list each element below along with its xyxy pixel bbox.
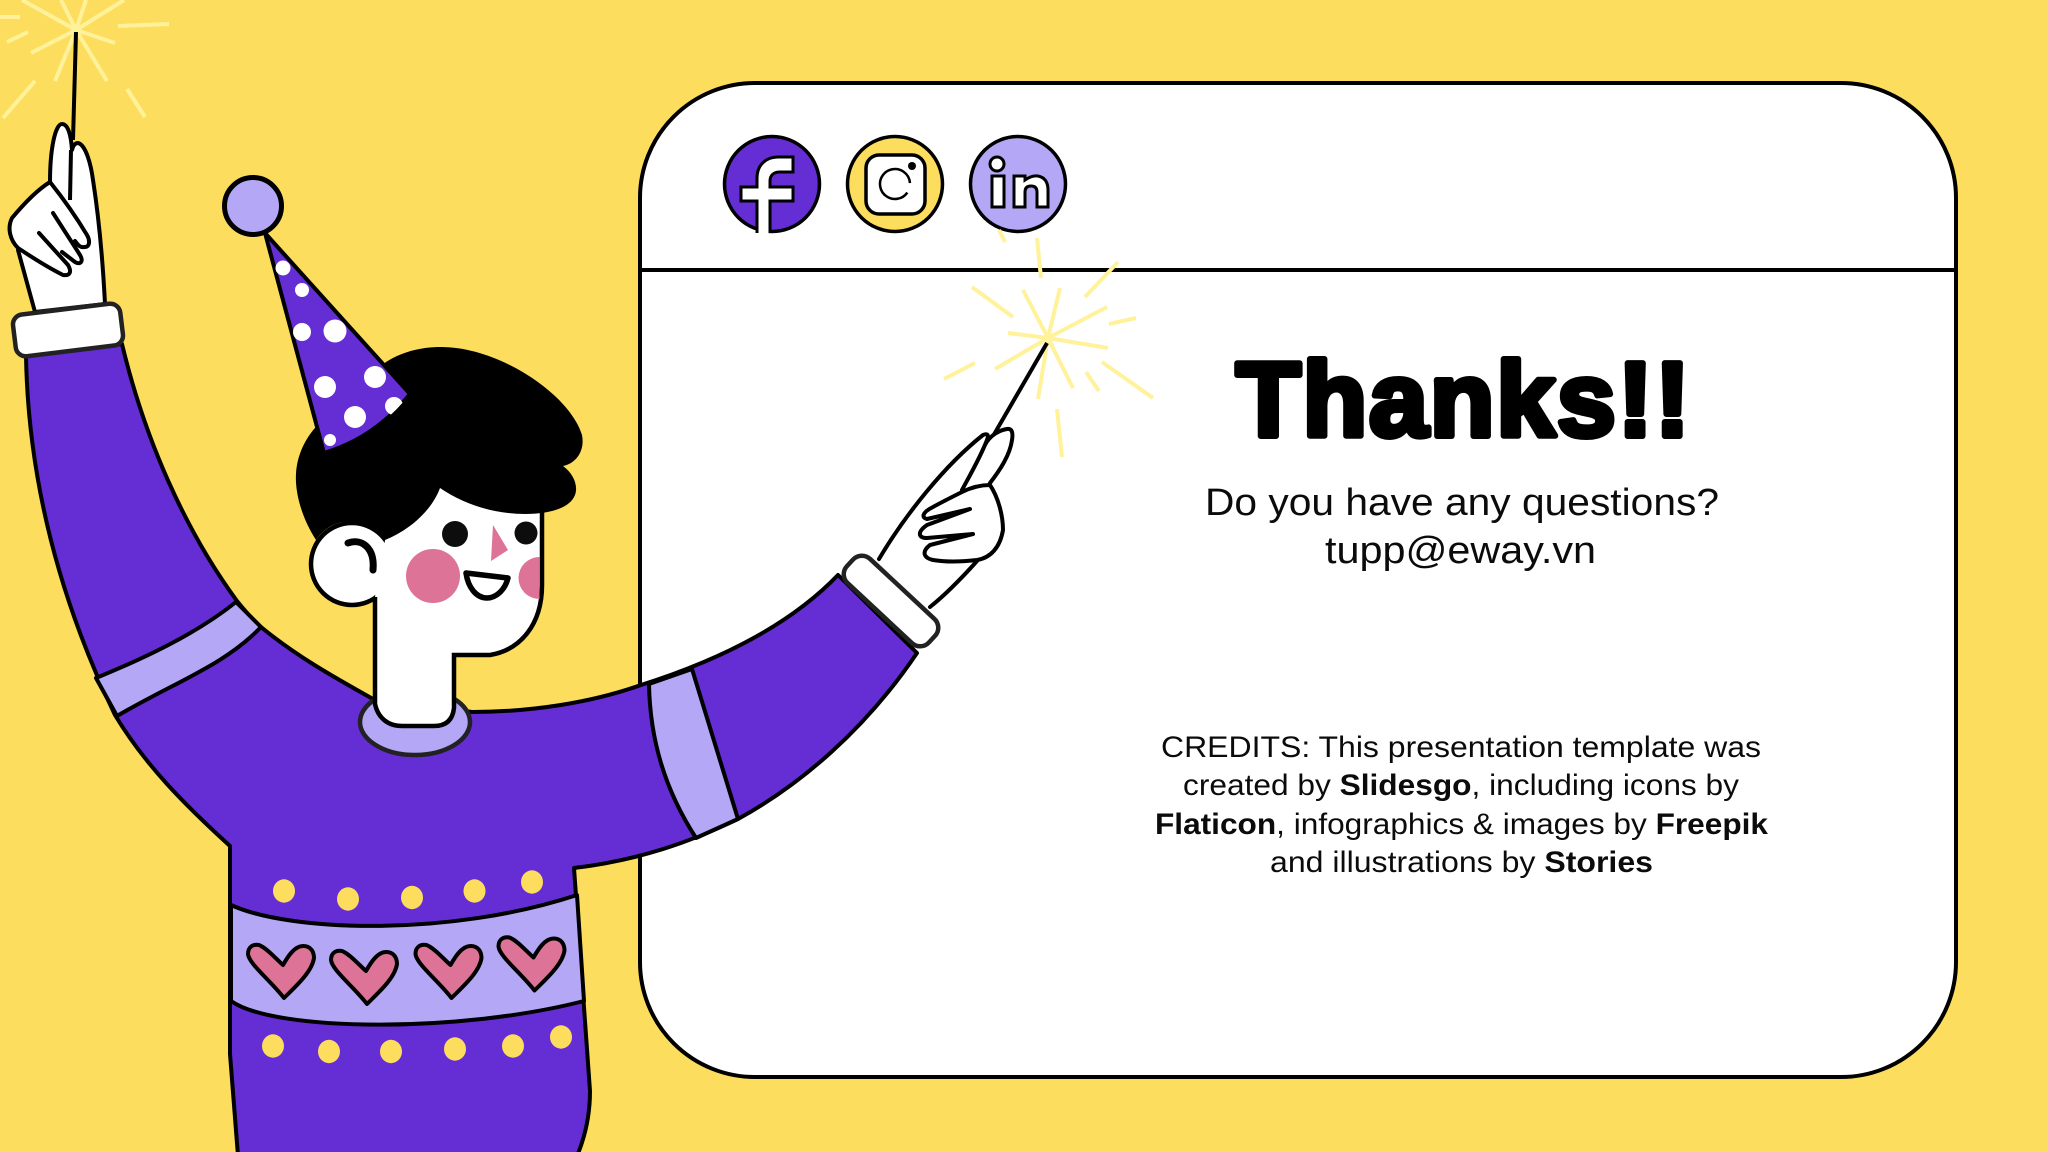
right hand <box>879 429 1012 607</box>
hair <box>296 347 583 540</box>
left cuff <box>12 303 124 357</box>
text block: credits <box>1155 731 1768 879</box>
text block: credits: and illustrations by Stories <box>1270 846 1653 879</box>
party hat <box>224 178 410 453</box>
left hand <box>10 124 105 312</box>
sweater <box>26 344 917 1152</box>
illustration: party person <box>10 124 1012 1152</box>
ear <box>311 523 393 605</box>
yellow dots <box>262 870 572 1063</box>
text block: question: Do you have any questions? <box>1205 482 1719 524</box>
icon: right sparkler <box>944 230 1153 457</box>
right cuff <box>839 551 943 651</box>
icon: instagram <box>848 136 942 232</box>
panel: browser window <box>640 83 1956 1077</box>
waist band <box>231 895 584 1025</box>
face and neck <box>348 470 542 726</box>
icon: facebook <box>724 136 820 233</box>
collar <box>360 689 470 755</box>
text block: credits: created by Slidesgo, including icons by <box>1183 769 1739 802</box>
text block: email: tupp@eway.vn <box>1325 530 1596 572</box>
text block: credits: CREDITS: This presentation template was <box>1161 731 1761 764</box>
hearts <box>248 937 564 1004</box>
text block: credits: Flaticon, infographics & images by Freepik <box>1155 808 1768 841</box>
icon: left sparkler <box>0 0 169 140</box>
title: Thanks!! <box>1236 341 1690 459</box>
icon: linkedin <box>970 136 1066 232</box>
right sleeve stripe <box>649 669 738 838</box>
left sleeve stripe <box>96 602 261 716</box>
